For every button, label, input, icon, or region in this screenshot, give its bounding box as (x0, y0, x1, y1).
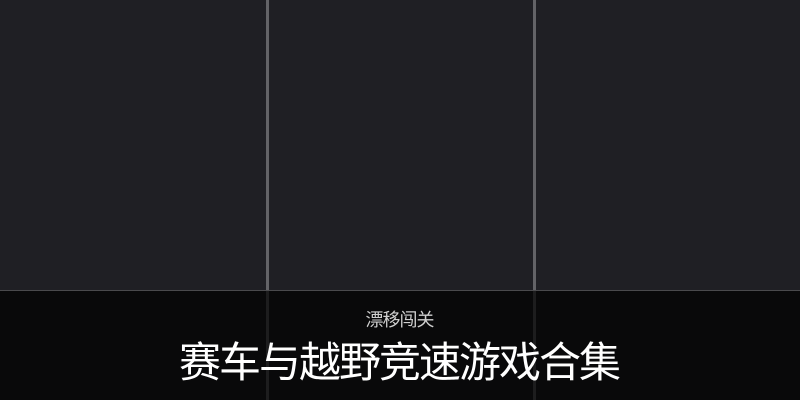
caption band (0, 290, 800, 400)
divider: right (533, 0, 536, 400)
subtitle: 漂移闯关 (366, 310, 434, 330)
panel: right (536, 0, 800, 400)
panel: center (269, 0, 533, 400)
divider: left (266, 0, 269, 400)
title: 赛车与越野竞速游戏合集 (179, 339, 619, 386)
panel: left (0, 0, 266, 400)
